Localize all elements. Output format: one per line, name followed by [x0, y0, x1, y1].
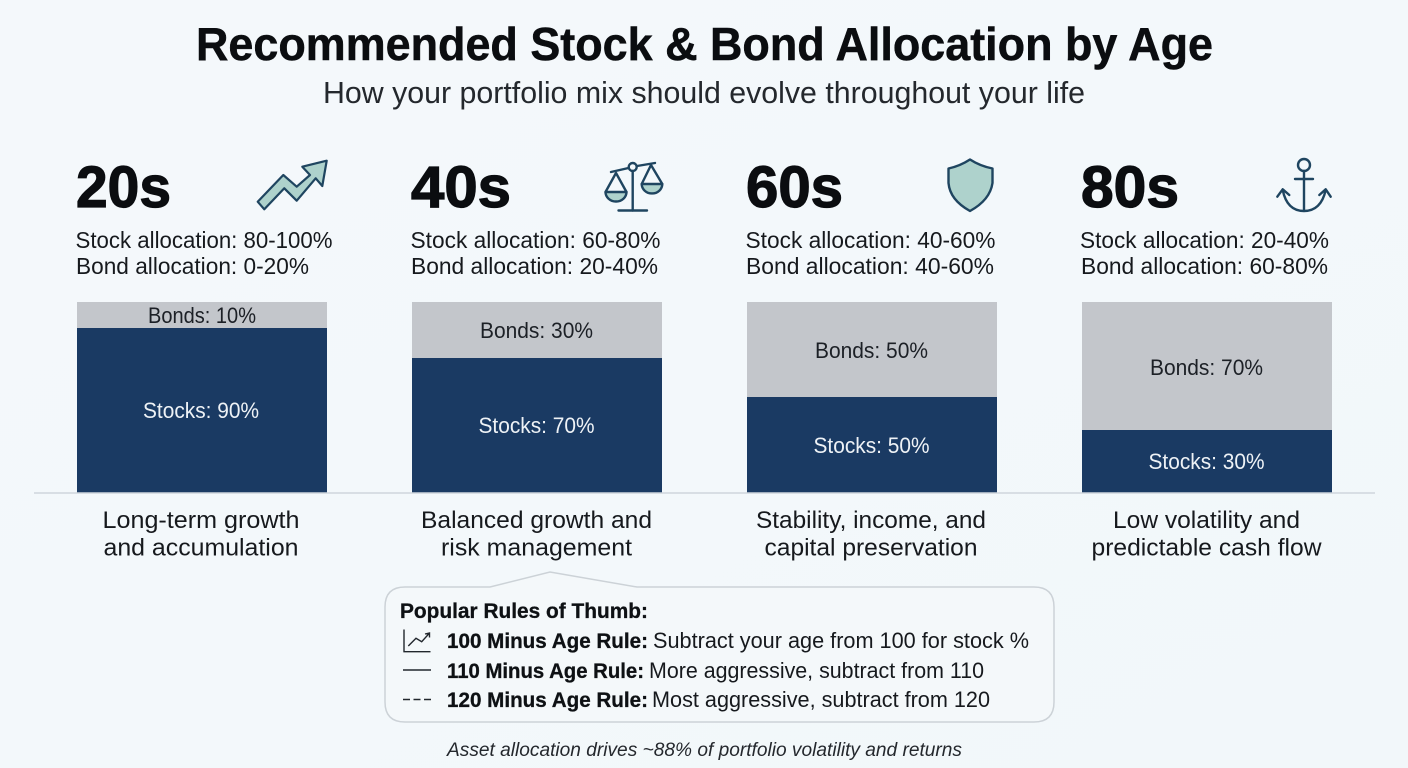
allocation ranges [76, 227, 332, 279]
caption: risk management [441, 534, 632, 562]
icon: balance scale [606, 163, 662, 210]
allocation ranges [1080, 227, 1329, 279]
rule: 100 minus age: Subtract your age from 100 for stock % [653, 628, 1029, 653]
stacked bar: 40s: Bonds: 30% [480, 318, 593, 343]
panel: 60s [746, 155, 997, 562]
rule: 100 minus age [404, 628, 1029, 653]
rule: 120 minus age: Most aggressive, subtract from 120 [652, 687, 990, 712]
rule: 120 minus age: 120 Minus Age Rule: [447, 689, 648, 712]
allocation ranges: Stock allocation: 60-80% [410, 227, 660, 253]
icon: solid line [403, 669, 431, 671]
panel: 80s [1080, 155, 1332, 562]
allocation ranges: Bond allocation: 40-60% [746, 253, 994, 279]
title: Recommended Stock & Bond Allocation by Age [196, 18, 1213, 70]
caption: Stability, income, and [756, 507, 986, 534]
allocation ranges: Bond allocation: 0-20% [76, 253, 309, 279]
panel: 20s [76, 155, 332, 562]
rule: 120 minus age [403, 687, 990, 712]
stacked bar: 20s: Stocks: 90% [143, 398, 259, 423]
callout: popular rules of thumb [385, 572, 1054, 722]
callout box [385, 572, 1054, 722]
rule: 100 minus age: 100 Minus Age Rule: [447, 630, 648, 653]
icon: anchor [1277, 159, 1331, 211]
icon: dashed line [403, 698, 431, 700]
stacked bar: 80s [1082, 302, 1332, 493]
allocation ranges: Stock allocation: 40-60% [746, 227, 996, 253]
caption [1092, 507, 1322, 562]
caption: capital preservation [764, 534, 978, 562]
stacked bar: 40s [412, 302, 662, 493]
allocation ranges: Bond allocation: 20-40% [411, 253, 658, 279]
allocation ranges [410, 227, 660, 279]
allocation ranges: Stock allocation: 20-40% [1080, 227, 1329, 253]
heading: 20s: 20s [76, 155, 171, 220]
caption: and accumulation [104, 534, 298, 562]
callout heading: Popular Rules of Thumb: [400, 600, 648, 623]
heading: 40s: 40s [411, 155, 511, 220]
caption: Low volatility and [1113, 507, 1300, 534]
stacked bar: 60s: Bonds: 50% [815, 338, 928, 363]
stacked bar: 20s: Bonds: 10% [148, 303, 256, 328]
rule: 110 minus age: 110 Minus Age Rule: [447, 660, 644, 683]
heading: 80s: 80s [1081, 155, 1179, 220]
caption [102, 507, 300, 562]
stacked bar: 20s [77, 302, 327, 493]
footnote: Asset allocation drives ~88% of portfolio volatility and returns [446, 739, 962, 761]
caption [756, 507, 986, 562]
icon: shield [948, 160, 992, 211]
caption: predictable cash flow [1092, 534, 1322, 562]
subtitle: How your portfolio mix should evolve throughout your life [323, 75, 1085, 110]
caption: Balanced growth and [421, 507, 652, 534]
allocation ranges: Stock allocation: 80-100% [76, 227, 332, 253]
allocation ranges [746, 227, 996, 279]
icon: line chart [404, 630, 430, 652]
caption [421, 507, 652, 562]
stacked bar: 80s: Stocks: 30% [1148, 449, 1264, 474]
heading: 60s: 60s [746, 155, 843, 220]
icon: rising arrow [258, 161, 327, 209]
caption: Long-term growth [102, 507, 300, 534]
stacked bar: 40s: Stocks: 70% [478, 413, 594, 438]
stacked bar: 60s [747, 302, 997, 493]
rule: 110 minus age: More aggressive, subtract from 110 [649, 658, 984, 683]
panel: 40s [410, 155, 662, 562]
stacked bar: 60s: Stocks: 50% [814, 433, 930, 458]
allocation ranges: Bond allocation: 60-80% [1081, 253, 1328, 279]
stacked bar: 80s: Bonds: 70% [1150, 355, 1263, 380]
rule: 110 minus age [403, 658, 984, 683]
